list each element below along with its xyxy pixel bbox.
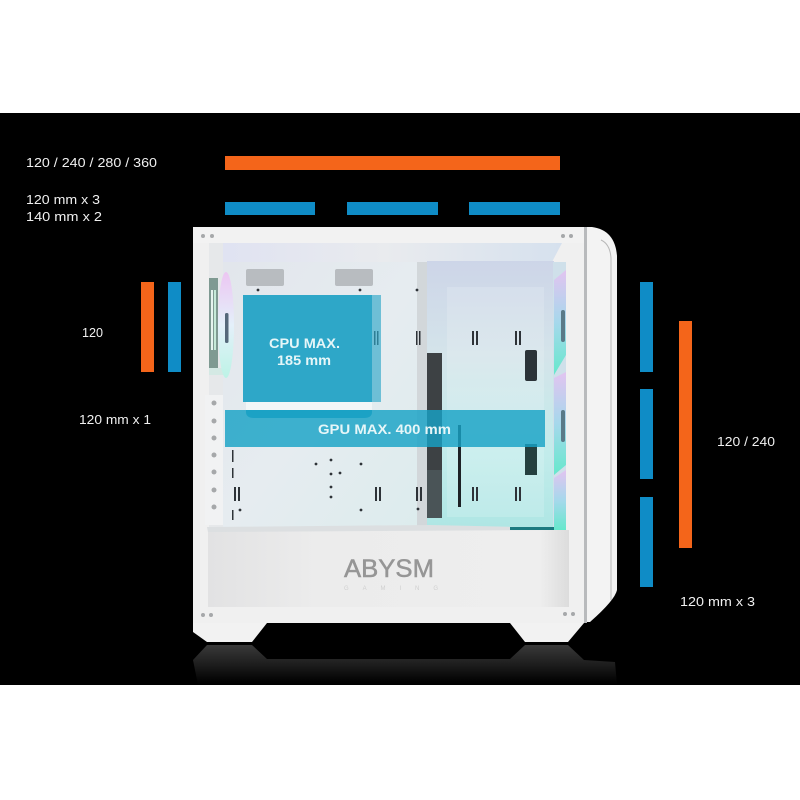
GPU clearance text: GPU MAX. 400 mm (318, 422, 451, 437)
bars: top fans (225, 202, 560, 215)
screws (201, 234, 575, 617)
label: top fan sizes: 140 mm x 2 (26, 209, 102, 224)
left wall with screws (209, 243, 223, 530)
front wall (553, 262, 566, 530)
main chassis (193, 227, 584, 623)
logo subtitle: GAMING (344, 586, 438, 592)
CPU clearance value: 185 mm (277, 353, 331, 368)
black backdrop (0, 113, 800, 685)
label: rear radiator size: 120 (82, 325, 103, 340)
bar: top radiator (225, 156, 560, 170)
top mesh (209, 243, 562, 262)
feet (193, 623, 267, 642)
CPU clearance overlay (243, 295, 381, 402)
bar: rear radiator (141, 282, 154, 372)
bar: rear fan (168, 282, 181, 372)
GPU clearance overlay (225, 410, 545, 447)
PC case (193, 227, 617, 642)
back plate (222, 262, 427, 530)
front fans (554, 270, 566, 530)
label: front radiator sizes: 120 / 240 (717, 434, 775, 449)
label: top fan sizes: 120 mm x 3 (26, 192, 100, 207)
CPU clearance text: CPU MAX. (269, 336, 340, 351)
CPU cooler silhouette (246, 400, 372, 418)
bar: front radiator (679, 321, 692, 548)
side panel curved (578, 227, 617, 622)
label: top fan sizes (26, 192, 102, 224)
standoff marks (232, 289, 521, 520)
label: front fan sizes: 120 mm x 3 (680, 594, 755, 609)
brand logo (344, 555, 438, 592)
rear fan (209, 272, 234, 378)
logo wordmark: ABYSM (344, 555, 434, 583)
bars: front fans (640, 282, 653, 587)
dark slots (427, 353, 442, 470)
label: rear fan size: 120 mm x 1 (79, 412, 151, 427)
bottom PSU shroud (208, 530, 569, 607)
label: top radiator sizes: 120 / 240 / 280 / 360 (26, 155, 157, 170)
cable openings (246, 269, 284, 286)
floor reflection (193, 645, 617, 685)
